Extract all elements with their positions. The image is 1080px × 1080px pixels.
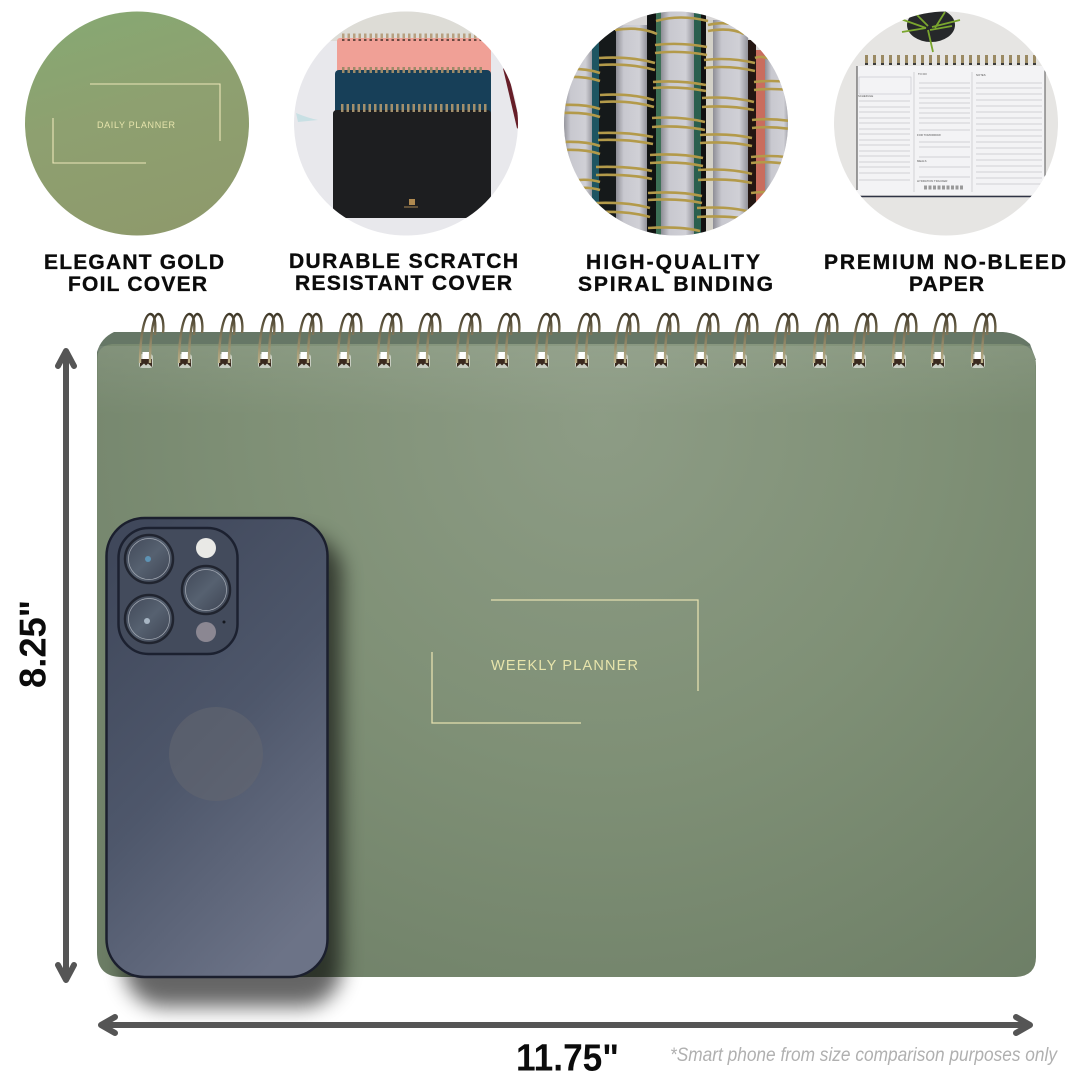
gold foil frame (53, 84, 220, 163)
label: durable scratch resistant cover (289, 250, 518, 295)
circle: high-quality spiral binding (563, 11, 790, 236)
lidar sensor (196, 622, 216, 642)
cover title: WEEKLY PLANNER (491, 658, 638, 674)
height arrow (58, 351, 74, 980)
label: elegant gold foil cover: ELEGANT GOLD (44, 251, 224, 274)
lens top (125, 535, 173, 583)
daily paper page: FOR TOMORROW (917, 133, 941, 137)
daily paper page: SCHEDULE (858, 94, 873, 98)
black notebook (333, 110, 491, 218)
label: durable scratch resistant cover: DURABLE SCRATCH (289, 250, 518, 273)
teal notebook (335, 70, 491, 114)
page headings: TO DO (918, 72, 928, 76)
water tracker (924, 186, 963, 190)
logo (409, 199, 415, 205)
label: premium no-bleed paper (824, 251, 1066, 296)
label: premium no-bleed paper: PREMIUM NO-BLEED (824, 251, 1066, 274)
gold foil frame (432, 600, 698, 723)
daily paper page: NOTES (976, 73, 986, 77)
circle: premium no-bleed paper (834, 8, 1060, 236)
spiral binding (139, 314, 995, 368)
daily paper page: HYDRATION TRACKER (917, 179, 947, 183)
camera island (118, 528, 238, 654)
weekly planner (97, 314, 1036, 977)
circle: elegant gold foil cover (25, 11, 249, 236)
label: durable scratch resistant cover: RESISTANT COVER (295, 272, 512, 295)
cover text: DAILY PLANNER (97, 120, 176, 130)
smartphone (106, 518, 342, 1007)
height label: 8.25" (12, 600, 54, 688)
phone body (106, 518, 328, 977)
width label: 11.75" (516, 1038, 619, 1080)
planner front cover (97, 344, 1036, 977)
wireless charging circle (169, 707, 263, 801)
label: high-quality spiral binding: SPIRAL BINDING (578, 273, 773, 296)
label: premium no-bleed paper: PAPER (909, 273, 984, 296)
lens middle (182, 566, 230, 614)
tape (296, 113, 318, 122)
lens bottom (125, 595, 173, 643)
flash (196, 538, 216, 558)
phone shadow (124, 535, 342, 1007)
circle: durable scratch resistant cover (294, 11, 520, 236)
notebook spines (563, 11, 790, 236)
pink notebook (337, 38, 491, 74)
label: elegant gold foil cover (44, 251, 224, 296)
label: high-quality spiral binding: HIGH-QUALITY (586, 251, 760, 274)
daily paper page (857, 60, 1045, 196)
pen (505, 68, 519, 128)
gold rings (563, 18, 790, 231)
cover highlight (98, 346, 1035, 416)
page rings (865, 55, 1036, 63)
plant (902, 12, 960, 52)
planner back cover strip (97, 332, 1036, 360)
width arrow (101, 1017, 1030, 1033)
label: elegant gold foil cover: FOIL COVER (68, 273, 207, 296)
daily paper page: MEALS (917, 159, 927, 163)
label: high-quality spiral binding (578, 251, 773, 296)
